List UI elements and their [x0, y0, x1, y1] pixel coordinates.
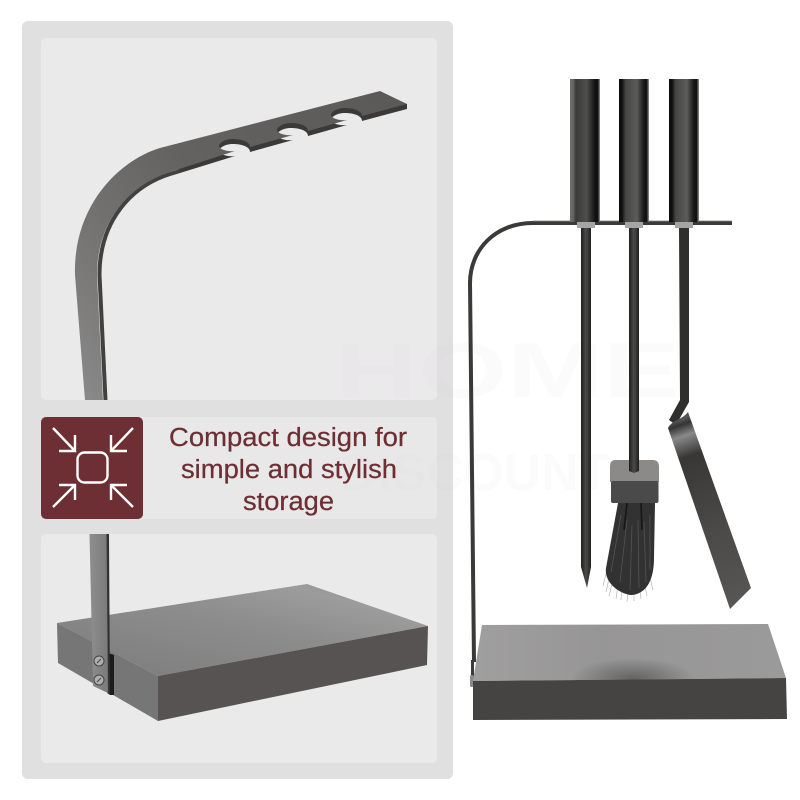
detail image: bent top arm with three notches	[75, 91, 407, 400]
panel: lower detail view background	[41, 534, 437, 763]
tool: shovel	[668, 79, 751, 609]
brush handle	[619, 79, 649, 222]
detail image: base block with bolted upright	[57, 534, 428, 721]
shovel handle	[669, 79, 699, 222]
tool: poker	[570, 79, 600, 588]
caption text	[169, 424, 408, 516]
bolt lower	[94, 675, 104, 685]
base shadow	[571, 658, 695, 700]
base top face	[57, 584, 428, 676]
product: base block	[473, 624, 787, 720]
panel: caption strip background	[41, 417, 437, 519]
product: upright frame and tool shelf	[470, 221, 732, 687]
arm inner curve edge	[100, 171, 180, 400]
poker rod	[581, 228, 591, 588]
shovel rod	[669, 228, 689, 425]
panel: grey backing card	[22, 21, 453, 779]
icon tile: compact arrows	[41, 417, 143, 519]
base front	[473, 678, 787, 720]
icon: four inward arrows	[53, 428, 133, 507]
watermark: HOME	[335, 326, 680, 414]
arm top surface	[75, 91, 407, 400]
base top	[473, 624, 786, 681]
shovel collar	[675, 222, 693, 228]
panel: upper detail view background	[41, 38, 437, 400]
brush block	[610, 460, 659, 482]
poker collar	[577, 222, 595, 228]
frame mounting bolts	[471, 660, 474, 680]
brush collar	[625, 222, 643, 228]
icon: centre square	[78, 452, 108, 482]
base left face	[57, 623, 158, 721]
poker handle	[570, 79, 600, 222]
watermark: DISCOUNT	[340, 444, 610, 502]
base right face	[158, 626, 428, 721]
caption text: Compact design for	[169, 424, 408, 452]
tool: brush	[603, 79, 659, 602]
upright bar	[90, 534, 108, 693]
caption text: simple and stylish	[181, 456, 397, 484]
upright dark side	[106, 534, 110, 695]
brush rod	[629, 228, 639, 473]
caption text: storage	[243, 488, 334, 516]
brush bristles	[603, 503, 655, 602]
shovel blade	[668, 412, 751, 609]
upright mounting shadow	[110, 654, 114, 695]
bolt upper	[94, 656, 104, 666]
arm edge thickness	[178, 104, 407, 173]
watermark	[335, 326, 680, 502]
